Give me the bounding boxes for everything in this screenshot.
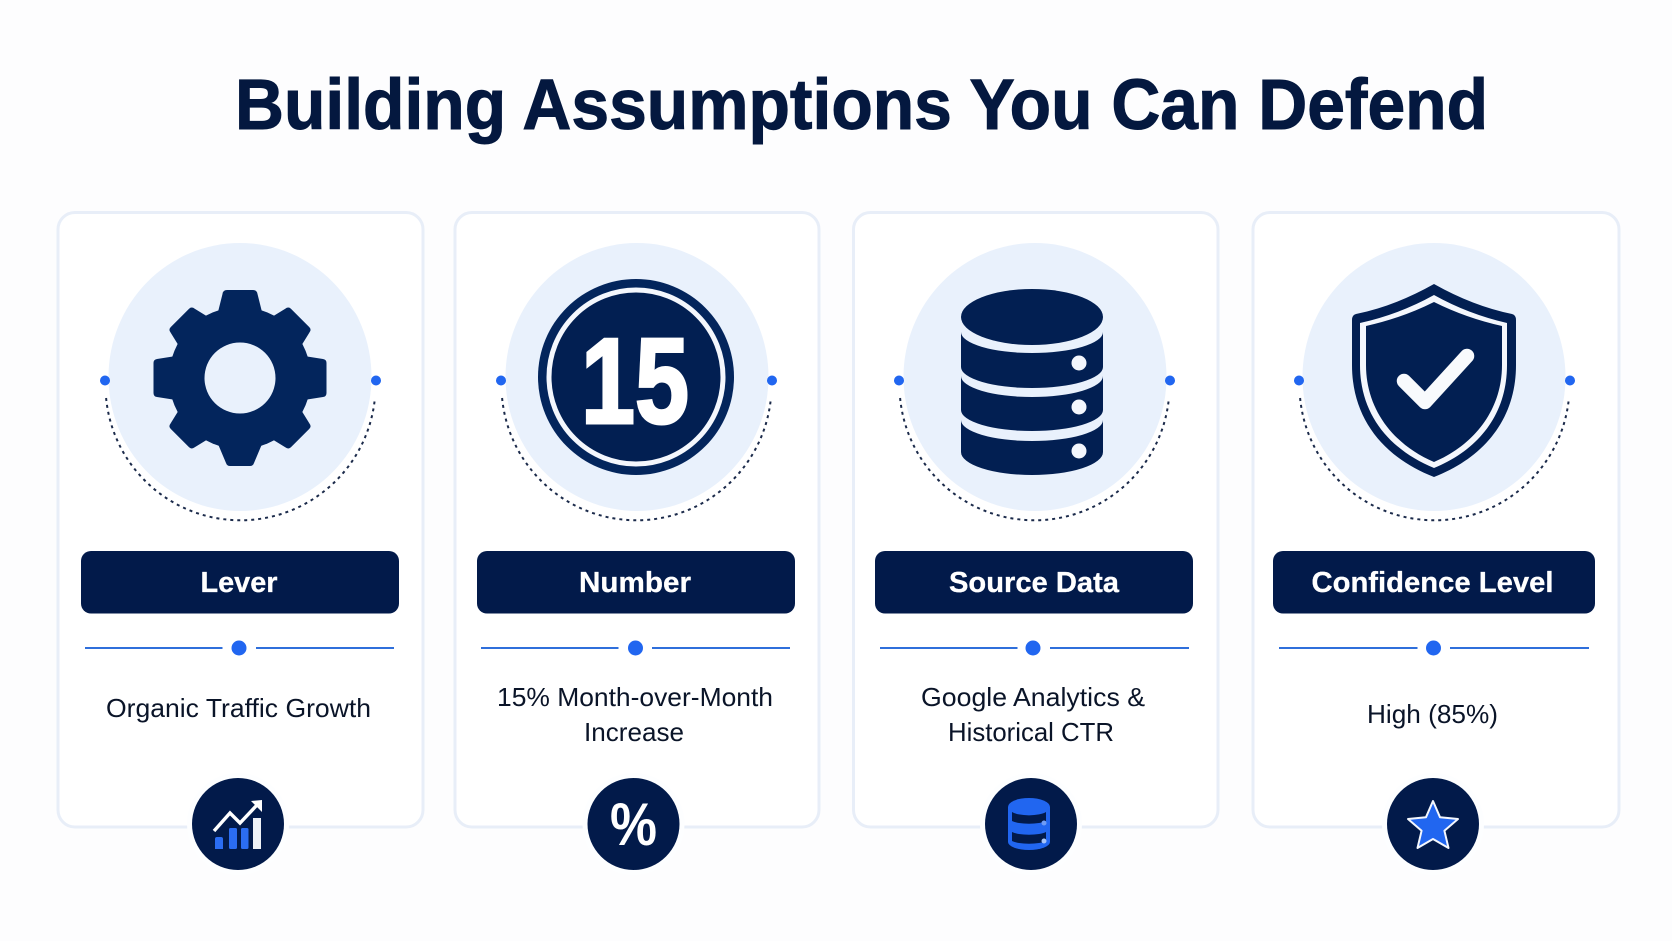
icon backdrop circle bbox=[904, 243, 1166, 511]
dotted arc with end dots bbox=[496, 376, 777, 520]
icon backdrop circle bbox=[1302, 243, 1566, 511]
card frame bbox=[58, 212, 423, 827]
label pill: Confidence Level: Confidence Level bbox=[1312, 567, 1554, 599]
label pill: Number: Number bbox=[579, 567, 691, 599]
value text: Historical CTR bbox=[948, 717, 1114, 747]
value text: Organic Traffic Growth bbox=[106, 693, 371, 723]
icon: shield with check bbox=[1352, 284, 1516, 477]
value text: Google Analytics & bbox=[921, 682, 1145, 712]
icon: gear bbox=[154, 290, 326, 466]
dotted arc with end dots bbox=[894, 376, 1175, 520]
icon: database bbox=[961, 289, 1103, 475]
panel: lever bbox=[58, 212, 423, 875]
icon: number 15 in circle bbox=[538, 279, 734, 475]
value text bbox=[921, 682, 1145, 747]
icon: number 15 in circle: 15 bbox=[581, 313, 689, 449]
icon backdrop circle bbox=[108, 243, 372, 511]
value text: 15% Month-over-Month bbox=[497, 682, 773, 712]
badge: growth chart bbox=[187, 773, 289, 875]
panel: number bbox=[455, 212, 819, 875]
dotted arc with end dots bbox=[1294, 376, 1575, 520]
card frame bbox=[1253, 212, 1619, 827]
divider with dot bbox=[85, 640, 394, 656]
label pill: Lever: Lever bbox=[200, 567, 278, 599]
divider with dot bbox=[481, 640, 790, 656]
panel: confidence level bbox=[1253, 212, 1619, 875]
badge: database bbox=[980, 773, 1082, 875]
label pill: Lever bbox=[81, 551, 399, 614]
divider with dot bbox=[1279, 640, 1589, 656]
icon backdrop circle bbox=[506, 243, 768, 511]
title: Building Assumptions You Can Defend bbox=[235, 66, 1488, 145]
badge: star bbox=[1382, 773, 1484, 875]
label pill: Source Data: Source Data bbox=[949, 567, 1120, 599]
card frame bbox=[455, 212, 819, 827]
divider with dot bbox=[880, 640, 1189, 656]
label pill: Number bbox=[477, 551, 795, 614]
card frame bbox=[854, 212, 1218, 827]
value text: High (85%) bbox=[1367, 699, 1498, 729]
value text: Increase bbox=[584, 717, 684, 747]
value text bbox=[497, 682, 773, 747]
badge: percent: % bbox=[610, 791, 657, 858]
label pill: Source Data bbox=[875, 551, 1193, 614]
label pill: Confidence Level bbox=[1273, 551, 1595, 614]
badge: percent bbox=[582, 773, 684, 875]
panel: source data bbox=[854, 212, 1218, 875]
dotted arc with end dots bbox=[100, 376, 381, 520]
